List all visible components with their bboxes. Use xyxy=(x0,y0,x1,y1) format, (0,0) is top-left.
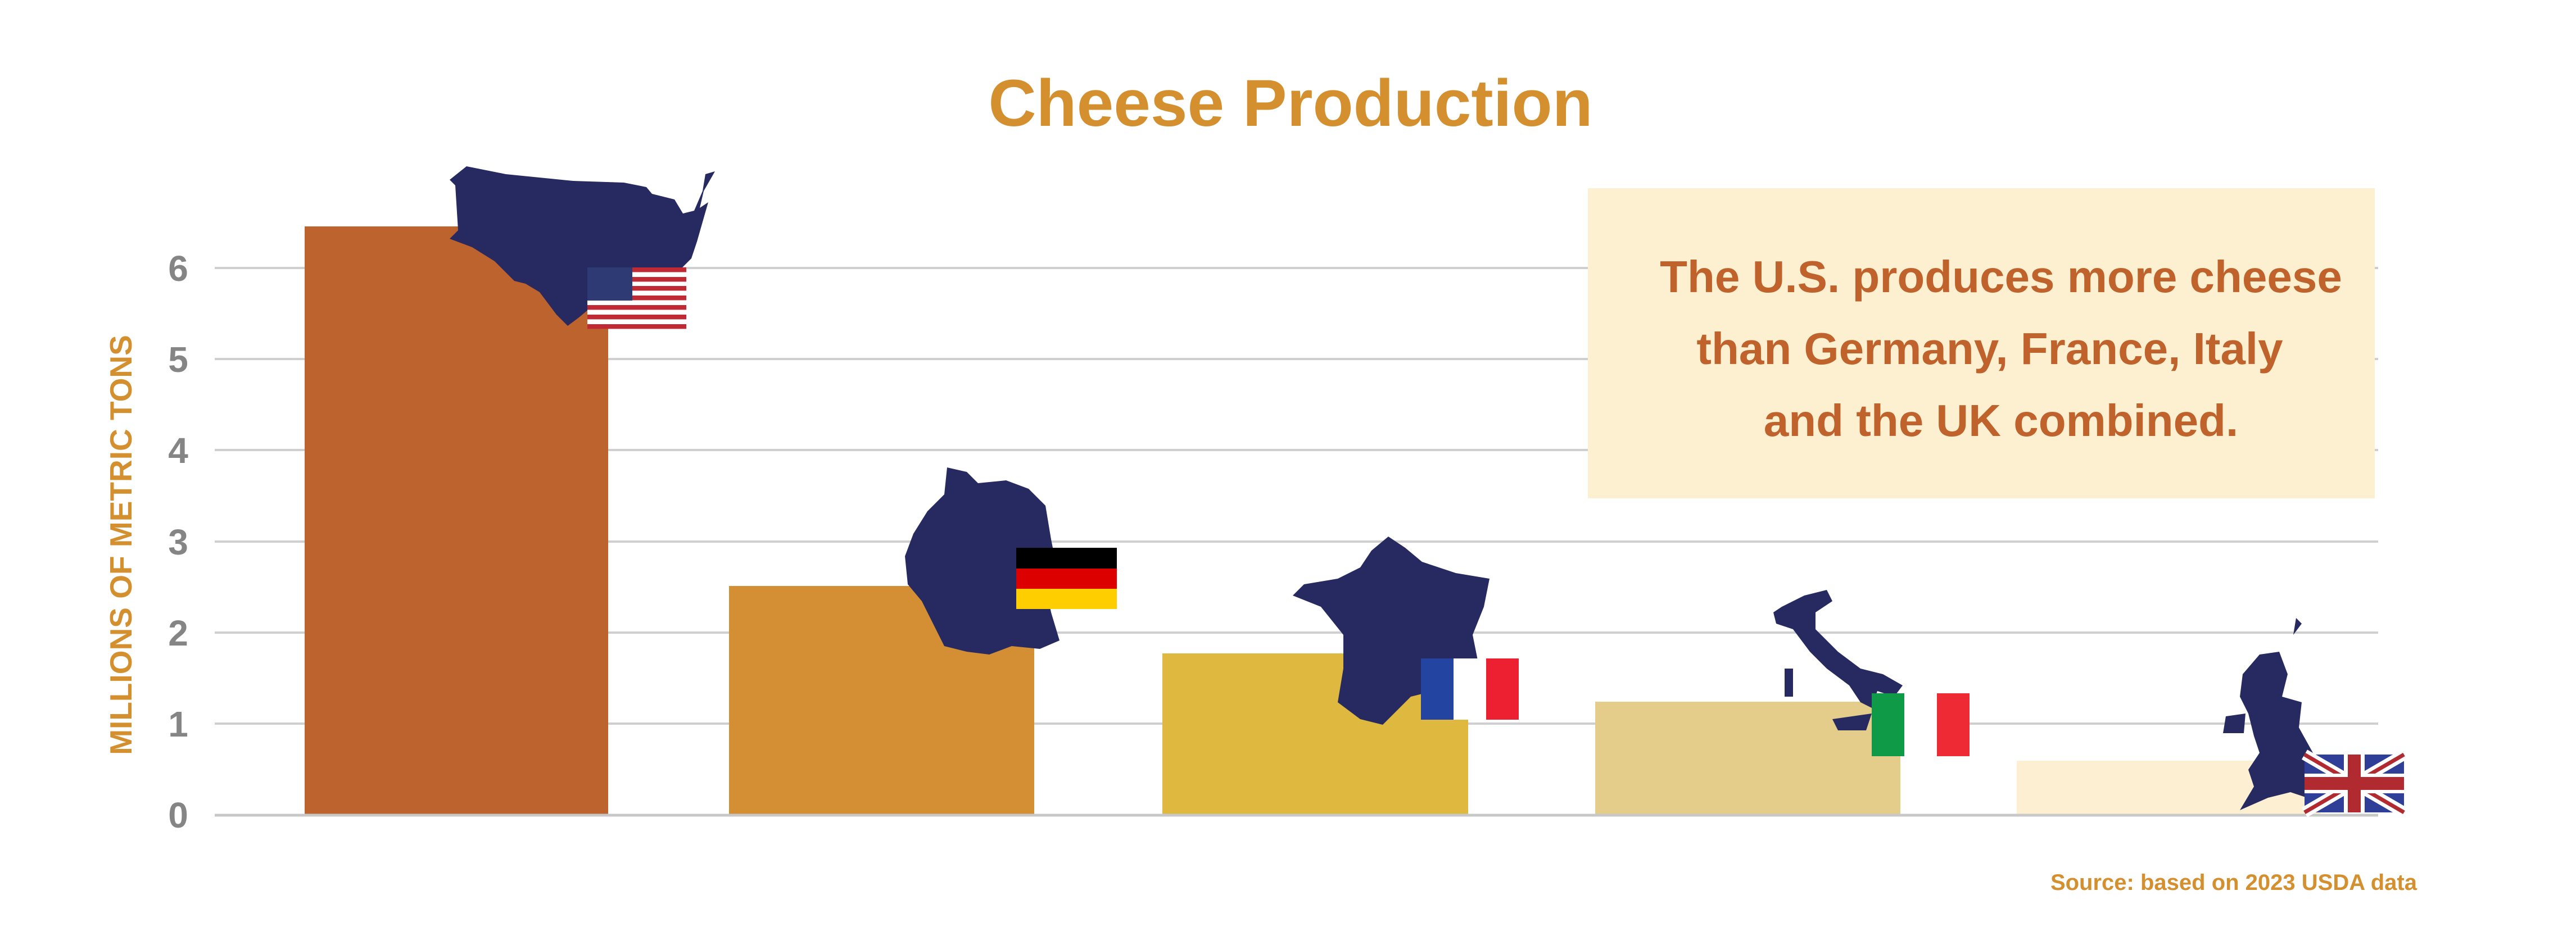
icon: US flag xyxy=(587,267,686,329)
y axis tick labels: 2 xyxy=(168,613,188,653)
icon: Germany flag xyxy=(1016,548,1117,609)
icon: UK flag xyxy=(2305,755,2404,812)
y axis tick labels xyxy=(168,248,188,835)
bar: UK xyxy=(2017,761,2321,815)
bar: Italy xyxy=(1595,702,1900,815)
y axis tick labels: 6 xyxy=(168,248,188,289)
y axis title: MILLIONS OF METRIC TONS xyxy=(103,335,138,755)
source note: Source: based on 2023 USDA data xyxy=(2050,870,2417,895)
icon: Germany map xyxy=(905,467,1060,655)
icon: US map xyxy=(450,166,715,329)
callout: The U.S. produces more cheese xyxy=(1660,252,2342,302)
bar: US xyxy=(305,226,608,815)
icon: France flag xyxy=(1421,658,1519,720)
icon: Italy map xyxy=(1773,590,1903,730)
icon: Italy flag xyxy=(1872,693,1970,756)
y axis tick labels: 5 xyxy=(168,339,188,380)
callout: than Germany, France, Italy xyxy=(1696,324,2283,374)
bar: Germany xyxy=(729,586,1034,815)
bar: France xyxy=(1162,653,1468,815)
callout: and the UK combined. xyxy=(1764,396,2238,446)
icon: UK map xyxy=(2223,618,2319,810)
y axis tick labels: 4 xyxy=(168,430,188,471)
y axis tick labels: 3 xyxy=(168,522,188,562)
title: Cheese Production xyxy=(988,66,1593,140)
y axis tick labels: 1 xyxy=(168,704,188,744)
callout xyxy=(1588,188,2375,498)
y axis tick labels: 0 xyxy=(168,795,188,835)
icon: France map xyxy=(1293,537,1490,725)
